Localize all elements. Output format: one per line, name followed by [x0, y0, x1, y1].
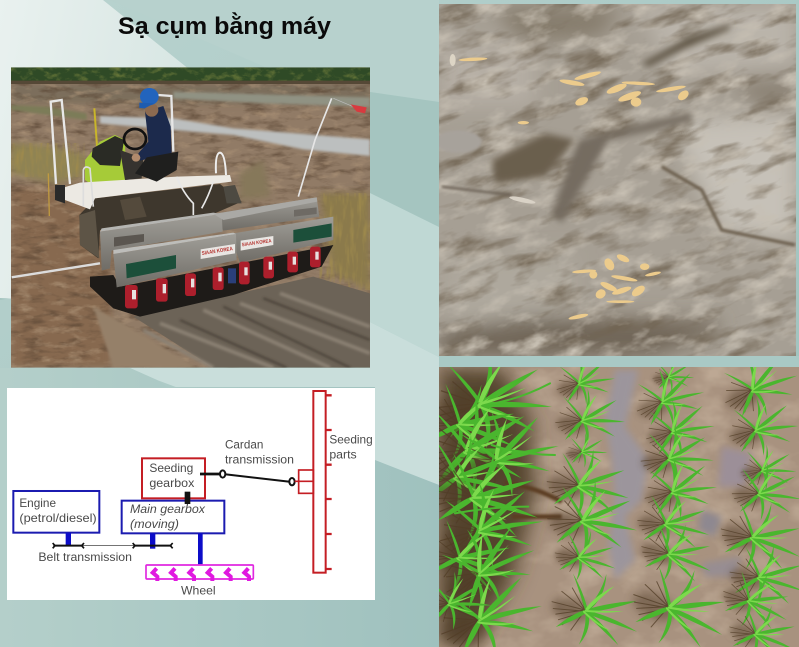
- wheel: Wheel: [181, 584, 216, 597]
- cardan transmission: Cardan: [225, 439, 263, 452]
- seeding units: [125, 247, 321, 308]
- title: Sạ cụm bằng máy: [118, 12, 332, 40]
- engine box: (petrol/diesel): [19, 512, 97, 525]
- main gearbox box: Main gearbox: [130, 503, 206, 516]
- seedling row: fourth: [718, 367, 799, 647]
- field backdrop: [11, 67, 370, 368]
- wheel: [146, 533, 253, 597]
- engine box: [13, 491, 99, 533]
- panel: machine transmission diagram: [7, 388, 375, 600]
- photo: rice seeds on wet mud: [439, 4, 796, 356]
- cardan transmission: [200, 439, 295, 485]
- photo: rice seeding machine in a muddy field: [11, 67, 370, 368]
- seedling row: second: [546, 367, 637, 645]
- main gearbox box: (moving): [130, 518, 179, 531]
- mud surface: [439, 4, 796, 356]
- seedling row: third: [629, 367, 724, 647]
- flooded soil: [439, 367, 799, 647]
- seeding gearbox box: [142, 458, 205, 504]
- seeder hoppers: SIAAN KOREA: [201, 246, 233, 257]
- seeding gearbox box: gearbox: [149, 477, 195, 490]
- seeding gearbox box: Seeding: [149, 462, 193, 475]
- rice seeds cluster: [450, 54, 690, 321]
- engine box: Engine: [19, 497, 56, 510]
- photo: young rice seedlings in rows: [439, 367, 799, 647]
- seeder hoppers: [12, 98, 367, 317]
- cardan transmission: transmission: [225, 454, 294, 467]
- seeding parts bar: [295, 391, 373, 573]
- main gearbox box: [122, 501, 224, 533]
- tractor: [48, 95, 242, 258]
- belt transmission: [38, 533, 173, 564]
- driver: [120, 88, 178, 182]
- seeder hoppers: SIAAN KOREA: [241, 238, 272, 248]
- seeding parts bar: parts: [329, 449, 357, 462]
- seedling row: left dense clump: [439, 367, 558, 647]
- seeding parts bar: Seeding: [329, 434, 373, 447]
- belt transmission: Belt transmission: [38, 551, 132, 564]
